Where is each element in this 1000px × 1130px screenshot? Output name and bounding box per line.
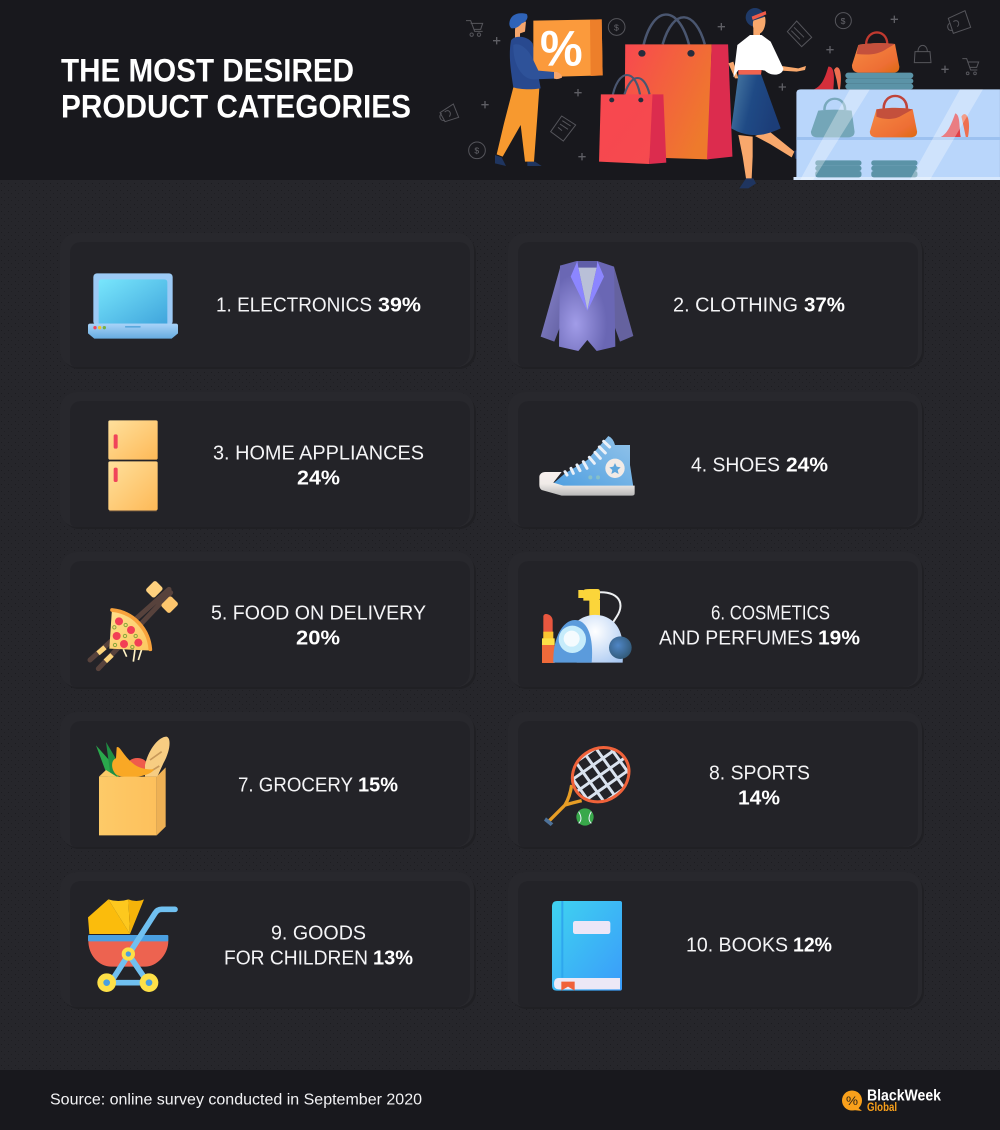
label: 3. HOME APPLIANCES	[213, 442, 424, 464]
man carrying percent box	[495, 13, 603, 166]
label: FOR CHILDREN	[224, 946, 368, 970]
card 7: grocery	[60, 712, 476, 849]
shelf heels	[941, 113, 961, 137]
card panel	[508, 233, 924, 369]
card panel	[60, 712, 476, 849]
logo: BlackWeek Global	[842, 1088, 941, 1114]
label: 39%	[378, 294, 421, 316]
shelf handbag teal	[811, 99, 855, 137]
label: 20%	[296, 626, 340, 650]
label: 4. SHOES	[691, 454, 780, 476]
card 1: electronics	[60, 233, 476, 369]
shelf handbag orange	[870, 96, 917, 137]
label: 5. FOOD ON DELIVERY	[211, 602, 426, 624]
dollar signs left: $	[474, 146, 479, 156]
card panel	[60, 872, 476, 1009]
top of shelf: sweaters, handbag, icons right	[845, 11, 979, 89]
woman figure	[728, 8, 807, 188]
card 6: cosmetics and perfumes	[508, 552, 924, 689]
plus marks right	[891, 16, 949, 73]
label: AND PERFUMES	[659, 626, 813, 650]
icon: grocery bag	[96, 737, 170, 835]
card panel	[60, 233, 476, 369]
label: 24%	[297, 466, 340, 490]
card 5: food on delivery	[60, 552, 476, 689]
label: 7. GROCERY	[238, 774, 353, 796]
card 8: sports	[508, 712, 924, 849]
icon: perfume and lipstick	[542, 589, 632, 663]
dollar sign: $	[841, 16, 846, 26]
source note: Source: online survey conducted in September 2020	[50, 1092, 422, 1108]
label: 19%	[818, 626, 860, 650]
plus marks left	[481, 37, 586, 160]
big shopping bag	[624, 15, 732, 159]
card 9: goods for children	[60, 872, 476, 1009]
woman and nearby icons	[718, 8, 851, 188]
label: 24%	[786, 454, 828, 476]
logo wordmark	[867, 1088, 941, 1114]
icon: pizza and chopsticks	[90, 580, 179, 669]
card panel	[508, 552, 924, 689]
label: 2. CLOTHING	[673, 294, 798, 316]
label	[709, 762, 810, 810]
label	[224, 922, 413, 970]
label: 6. COSMETICS	[711, 602, 830, 624]
card 2: clothing	[508, 233, 924, 369]
folded sweaters	[845, 73, 913, 89]
card 3: home appliances	[60, 392, 476, 529]
background outline icons left	[440, 19, 625, 159]
man carrying percent box: %	[540, 21, 583, 77]
card panel	[508, 872, 924, 1009]
label: 8. SPORTS	[709, 762, 810, 784]
label	[691, 454, 828, 476]
label: 15%	[358, 774, 398, 796]
card panel	[508, 712, 924, 849]
icon: fridge	[108, 420, 158, 511]
header band	[0, 0, 1000, 180]
title: PRODUCT CATEGORIES	[61, 88, 411, 124]
label: 9. GOODS	[271, 922, 366, 944]
glass display shelf	[794, 89, 1000, 180]
icon: stroller	[88, 899, 175, 992]
dollar signs left	[474, 22, 619, 156]
label: 37%	[804, 294, 845, 316]
label: 14%	[738, 786, 780, 810]
title: THE MOST DESIRED	[61, 52, 354, 88]
logo wordmark: BlackWeek	[867, 1088, 941, 1104]
card panel	[60, 392, 476, 529]
plus marks	[718, 23, 834, 91]
footer band	[0, 1070, 1000, 1130]
icon: jacket	[541, 261, 633, 351]
label	[211, 602, 426, 650]
outline icons right	[914, 11, 979, 75]
folded clothes	[815, 160, 917, 177]
icons near woman	[787, 13, 851, 47]
title	[61, 52, 411, 124]
logo wordmark: Global	[867, 1102, 897, 1114]
label: 13%	[373, 946, 413, 970]
dollar signs left: $	[614, 22, 619, 32]
label	[213, 442, 424, 490]
logo badge: %	[846, 1094, 858, 1108]
header illustration: shopping scene	[440, 8, 1000, 188]
icon: sneaker	[539, 436, 635, 496]
glass reflections	[800, 89, 983, 180]
handbag	[852, 32, 899, 73]
icon: tennis racket and ball	[544, 746, 630, 826]
card 4: shoes	[508, 392, 924, 529]
label: 10. BOOKS	[686, 934, 788, 956]
icon: laptop	[88, 273, 178, 339]
label	[659, 602, 860, 650]
label: 12%	[793, 934, 832, 956]
card panel	[508, 392, 924, 529]
heels on shelf top	[814, 67, 841, 89]
card 10: books	[508, 872, 924, 1009]
small shopping bag	[599, 75, 666, 164]
icon: book	[552, 901, 622, 991]
card panel	[60, 552, 476, 689]
label: 1. ELECTRONICS	[216, 294, 372, 316]
